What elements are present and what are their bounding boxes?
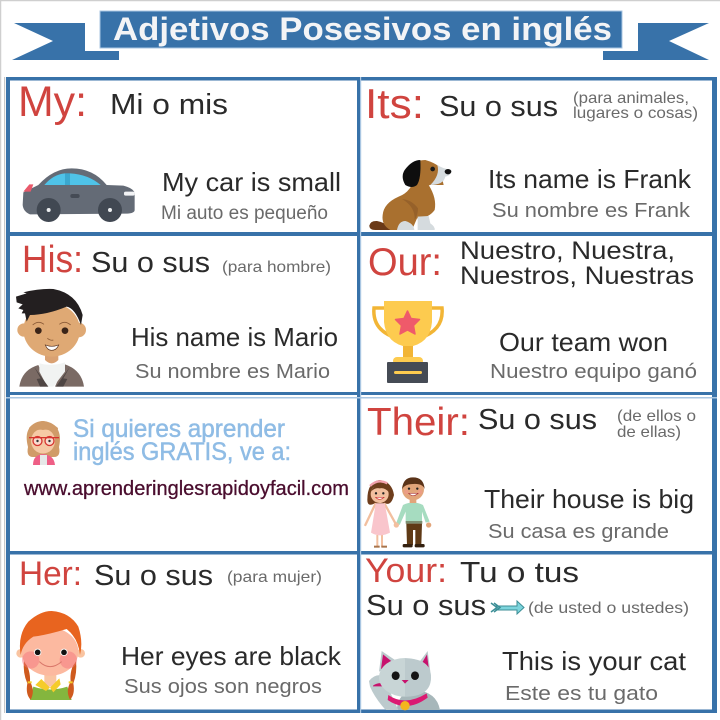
panel: its: lugares o cosas) (573, 105, 698, 122)
panel: her: Her: (19, 555, 82, 593)
panel: their: (de ellos o (617, 408, 696, 425)
panel: free english ad (23, 415, 349, 500)
panel: our: Nuestro equipo ganó (490, 361, 697, 383)
icon: arrow (491, 601, 524, 614)
panel: her (16, 555, 342, 700)
panel: their: Their: (367, 401, 470, 444)
icon: couple (365, 477, 431, 548)
panel: their (365, 401, 696, 548)
icon: boy (16, 289, 86, 387)
panel: our: Our team won (499, 327, 668, 357)
panel: your: Este es tu gato (505, 683, 658, 705)
title banner (12, 11, 709, 60)
panel: its: (para animales, (573, 90, 689, 107)
panel: their: de ellas) (617, 424, 681, 441)
panel: our: Our: (368, 241, 442, 284)
panel: their: Their house is big (484, 484, 694, 514)
panel: your (365, 552, 689, 710)
icon: girl with glasses (27, 421, 60, 465)
panel: your: Tu o tus (460, 557, 579, 589)
panel: her: Sus ojos son negros (124, 676, 322, 698)
panel: your: Su o sus (366, 590, 486, 622)
panel: his: (para hombre) (222, 259, 331, 276)
panel: my: Mi auto es pequeño (161, 203, 328, 224)
panel: her: (para mujer) (227, 569, 322, 586)
panel: my: My: (18, 78, 87, 126)
icon: dog (369, 160, 451, 230)
panel: my: My car is small (162, 167, 341, 197)
panel: my: Mi o mis (110, 89, 228, 121)
icon: lucky cat (369, 651, 440, 710)
panel: its: Its name is Frank (488, 164, 692, 194)
panel: his: Su nombre es Mario (135, 361, 330, 383)
title: Adjetivos Posesivos en inglés (113, 11, 612, 47)
panel: its: Su nombre es Frank (492, 200, 691, 222)
panel: my (18, 78, 341, 224)
panel: free english ad: www.aprenderinglesrapidoyfacil.com (23, 478, 349, 500)
icon: car (23, 168, 135, 222)
panel: free english ad: Si quieres aprender (73, 415, 285, 443)
panel: her: Su o sus (94, 560, 213, 592)
icon: redhead girl (16, 611, 85, 700)
panel: our (368, 237, 697, 383)
panel: his: His: (22, 239, 83, 281)
panel: its: Su o sus (439, 91, 558, 123)
panel: his: Su o sus (91, 247, 210, 279)
panel: our: Nuestros, Nuestras (460, 262, 694, 290)
panel: its: Its: (365, 80, 424, 127)
panel: your: Your: (365, 552, 447, 590)
panel: our: Nuestro, Nuestra, (460, 237, 675, 265)
panel: your: (de usted o ustedes) (528, 600, 689, 617)
panel: their: Su casa es grande (488, 521, 669, 543)
icon: trophy (374, 301, 442, 383)
panel: her: Her eyes are black (121, 641, 342, 671)
panel: his: His name is Mario (131, 322, 338, 352)
panel: their: Su o sus (478, 404, 597, 436)
panel: your: This is your cat (502, 646, 687, 676)
panel: his (16, 239, 338, 387)
panel: its (365, 80, 698, 230)
panel: free english ad: inglés GRATIS, ve a: (73, 438, 291, 466)
